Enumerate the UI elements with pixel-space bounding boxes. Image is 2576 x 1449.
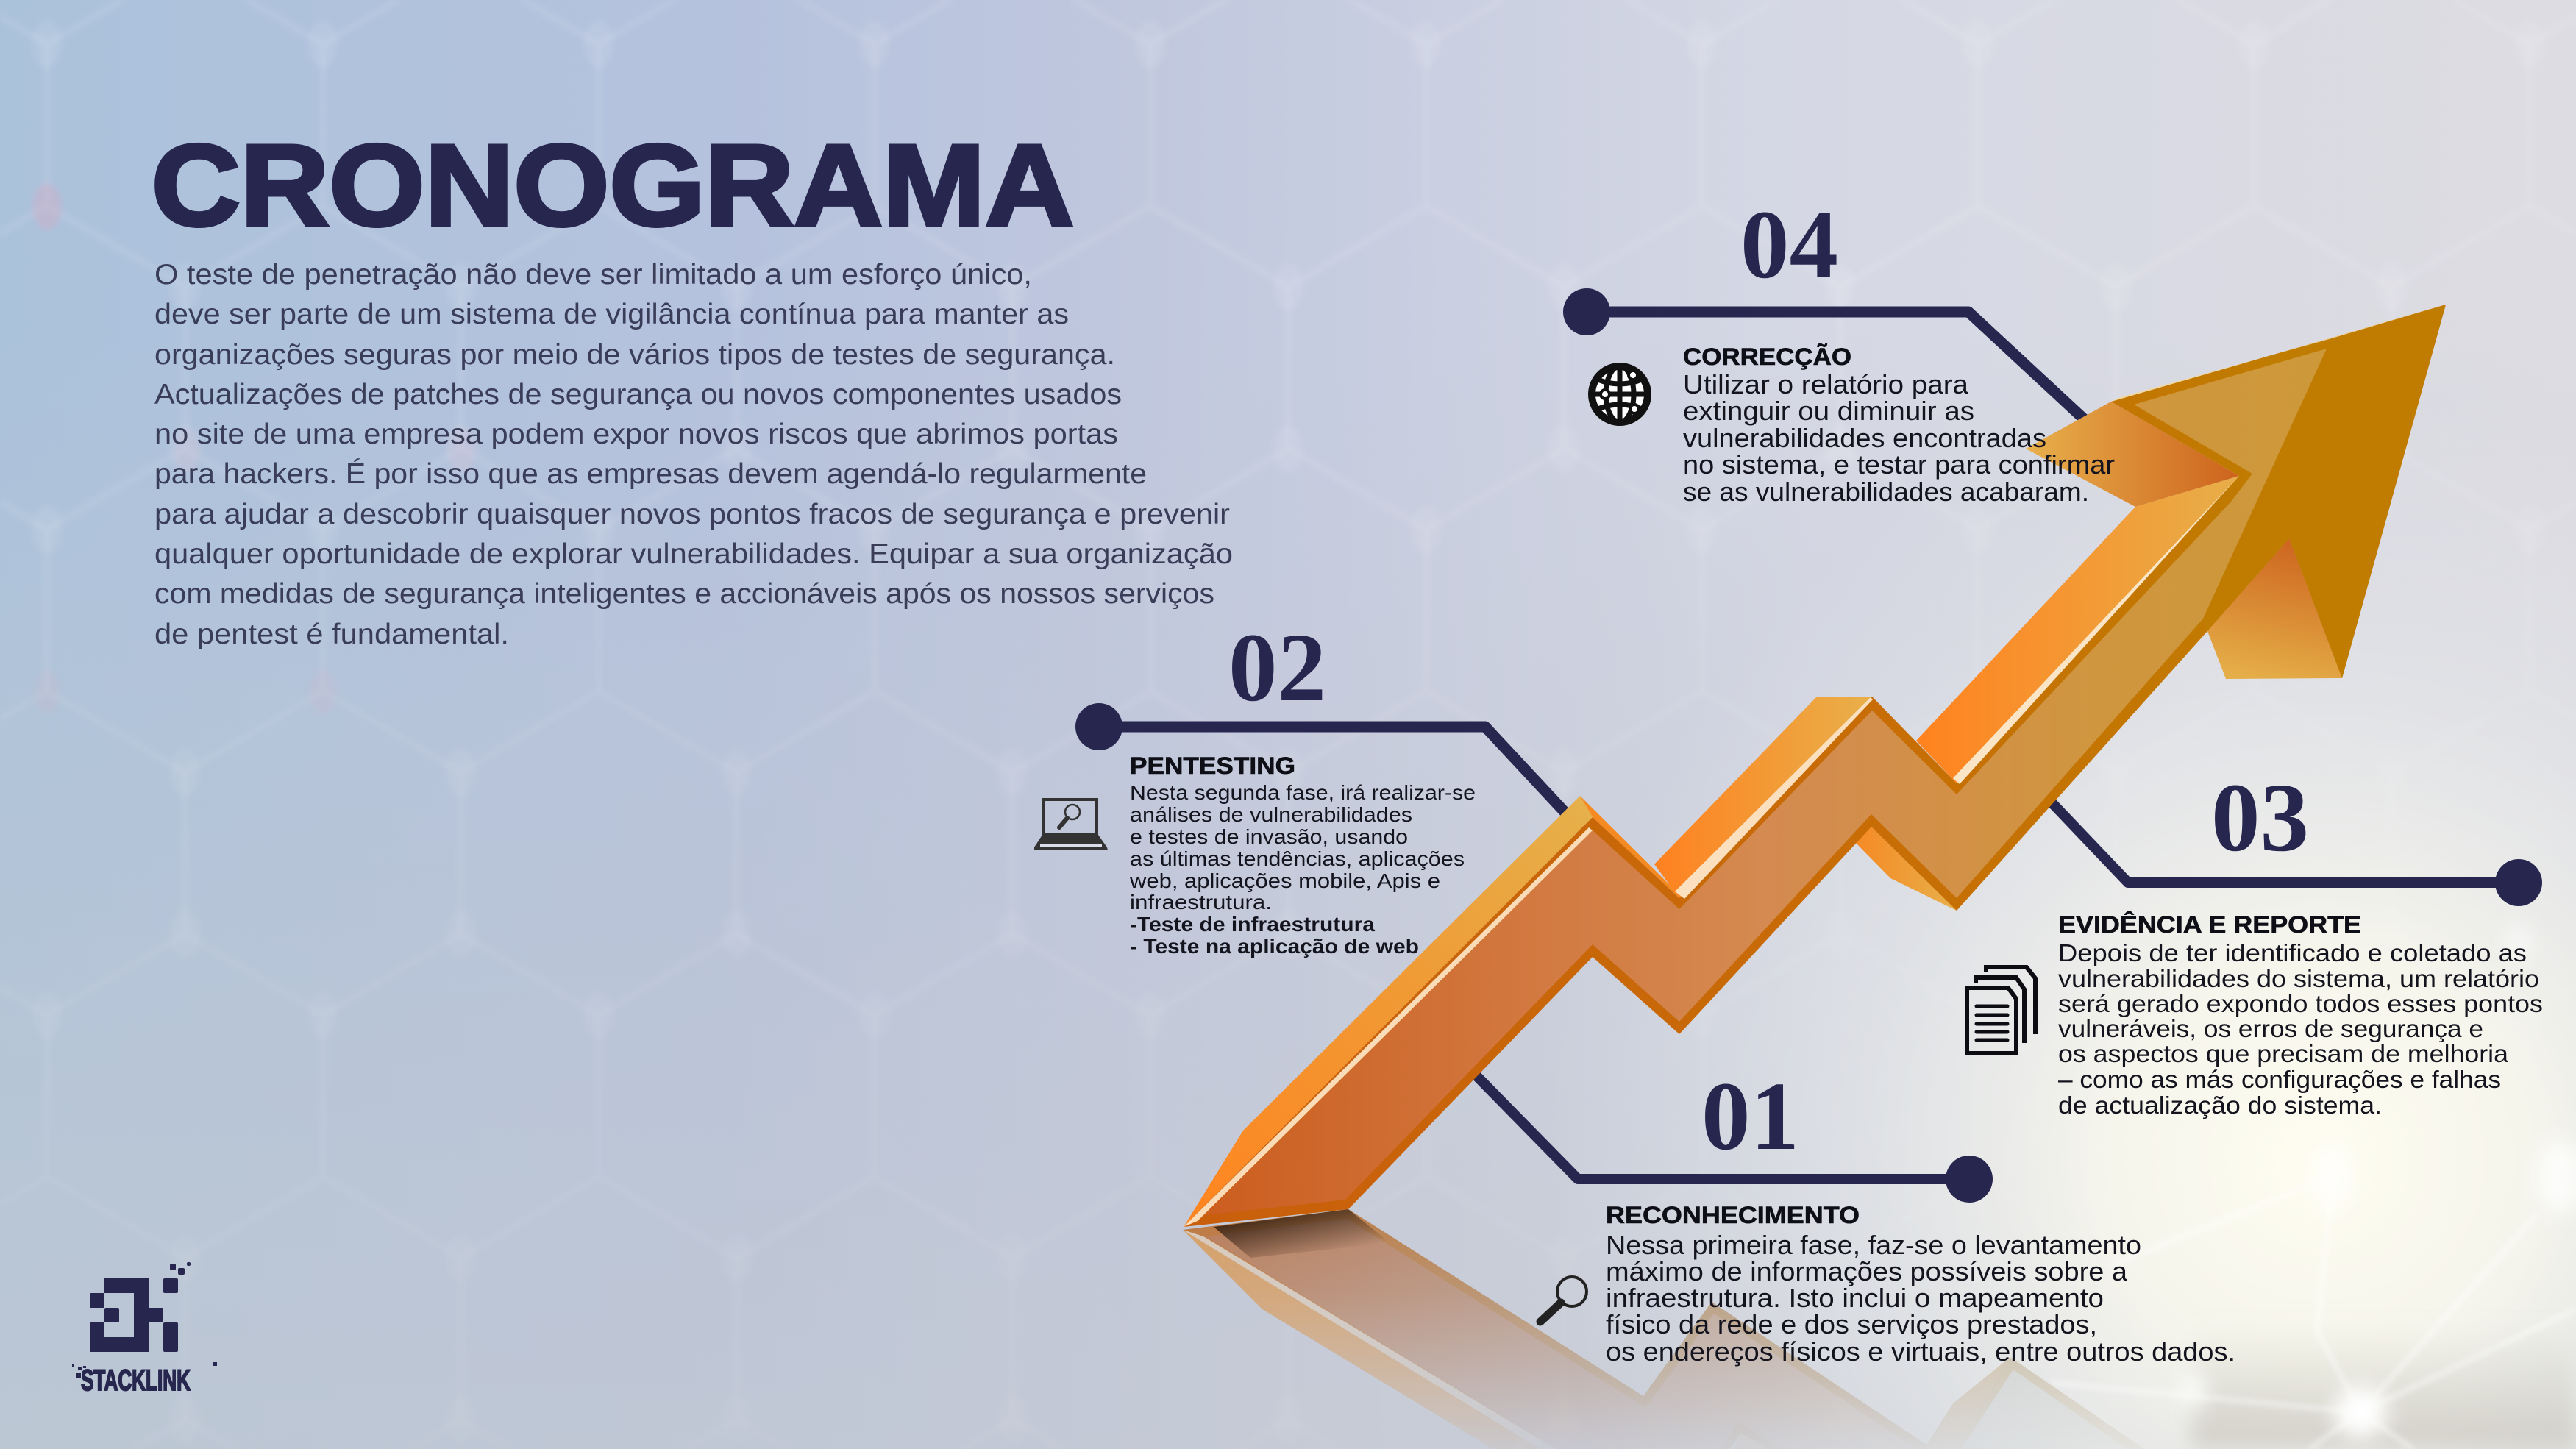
panel: step 04 correcção <box>1592 190 2115 507</box>
description: no sistema, e testar para confirmar <box>1683 449 2115 480</box>
description: máximo de informações possíveis sobre a <box>1606 1256 2128 1286</box>
description: físico da rede e dos serviços prestados, <box>1606 1309 2097 1339</box>
background light glow <box>1398 368 2576 1449</box>
panel: step 01 reconhecimento <box>1540 1061 2235 1367</box>
description: de actualização do sistema. <box>2058 1092 2382 1119</box>
intro paragraph: qualquer oportunidade de explorar vulnerabilidades. Equipar a sua organização <box>154 538 1233 570</box>
logo: stacklink: STACKLINK <box>81 1364 191 1397</box>
description: Nessa primeira fase, faz-se o levantamento <box>1606 1230 2141 1260</box>
description: -Teste de infraestrutura <box>1130 913 1375 936</box>
number 01: 01 <box>1701 1061 1799 1170</box>
icon: laptop with magnifier <box>1034 800 1108 850</box>
panel: step 03 evidência e reporte <box>1967 763 2543 1119</box>
description: análises de vulnerabilidades <box>1130 803 1412 826</box>
background bright network corner <box>2052 925 2576 1449</box>
description: web, aplicações mobile, Apis e <box>1129 869 1440 892</box>
description: vulnerabilidades do sistema, um relatório <box>2058 965 2539 992</box>
number 02: 02 <box>1228 613 1326 722</box>
rising zigzag arrow <box>1184 305 2446 1227</box>
reflection contact shadow <box>1214 1209 1390 1258</box>
panel: step 02 pentesting <box>1034 613 1476 958</box>
description <box>1683 369 2115 507</box>
description <box>2058 939 2543 1119</box>
intro paragraph: com medidas de segurança inteligentes e accionáveis após os nossos serviços <box>154 578 1214 610</box>
description: extinguir ou diminuir as <box>1683 396 1974 426</box>
background pink network nodes <box>32 183 475 714</box>
icon: globe <box>1592 366 1648 422</box>
description: Nesta segunda fase, irá realizar-se <box>1130 781 1476 804</box>
intro paragraph: para ajudar a descobrir quaisquer novos pontos fracos de segurança e prevenir <box>154 499 1230 530</box>
description <box>1129 781 1476 958</box>
description: Depois de ter identificado e coletado as <box>2058 939 2527 966</box>
logo: stacklink <box>72 1262 217 1397</box>
reflection of the arrow <box>1183 1209 2144 1449</box>
description: e testes de invasão, usando <box>1130 825 1408 848</box>
connector line: step 04 <box>1563 288 2111 444</box>
icon: stacked documents <box>1967 967 2035 1053</box>
description: os aspectos que precisam de melhoria <box>2058 1040 2509 1067</box>
intro paragraph: deve ser parte de um sistema de vigilância contínua para manter as <box>154 299 1069 330</box>
description: vulneráveis, os erros de segurança e <box>2058 1015 2483 1042</box>
icon: magnifier <box>1540 1277 1587 1322</box>
number 03: 03 <box>2211 763 2309 872</box>
intro paragraph <box>154 259 1233 650</box>
intro paragraph: para hackers. É por isso que as empresas devem agendá-lo regularmente <box>154 458 1147 490</box>
description: – como as más configurações e falhas <box>2058 1066 2501 1093</box>
description: as últimas tendências, aplicações <box>1130 847 1465 870</box>
connector line: step 02 <box>1075 703 1596 846</box>
title: CRONOGRAMA <box>152 121 1074 250</box>
description: vulnerabilidades encontradas <box>1683 423 2046 453</box>
description: se as vulnerabilidades acabaram. <box>1683 477 2089 507</box>
heading: PENTESTING <box>1130 752 1295 779</box>
heading: EVIDÊNCIA E REPORTE <box>2058 911 2361 938</box>
heading: RECONHECIMENTO <box>1606 1202 1860 1228</box>
description <box>1606 1230 2235 1367</box>
description: será gerado expondo todos esses pontos <box>2058 990 2543 1017</box>
connector line: step 03 <box>2023 772 2542 906</box>
description: infraestrutura. <box>1130 891 1272 914</box>
intro paragraph: de pentest é fundamental. <box>154 619 509 650</box>
description: os endereços físicos e virtuais, entre outros dados. <box>1606 1336 2235 1367</box>
number 04: 04 <box>1740 190 1838 299</box>
description: infraestrutura. Isto inclui o mapeamento <box>1606 1283 2104 1313</box>
intro paragraph: organizações seguras por meio de vários tipos de testes de segurança. <box>154 339 1115 371</box>
connector line: step 01 <box>1460 1059 1993 1203</box>
description: - Teste na aplicação de web <box>1130 935 1419 958</box>
background lower tone <box>0 331 2576 1449</box>
heading: CORRECÇÃO <box>1683 343 1851 370</box>
intro paragraph: no site de uma empresa podem expor novos riscos que abrimos portas <box>154 419 1118 450</box>
intro paragraph: Actualizações de patches de segurança ou novos componentes usados <box>154 379 1122 410</box>
intro paragraph: O teste de penetração não deve ser limitado a um esforço único, <box>154 259 1032 291</box>
description: Utilizar o relatório para <box>1683 369 1969 399</box>
